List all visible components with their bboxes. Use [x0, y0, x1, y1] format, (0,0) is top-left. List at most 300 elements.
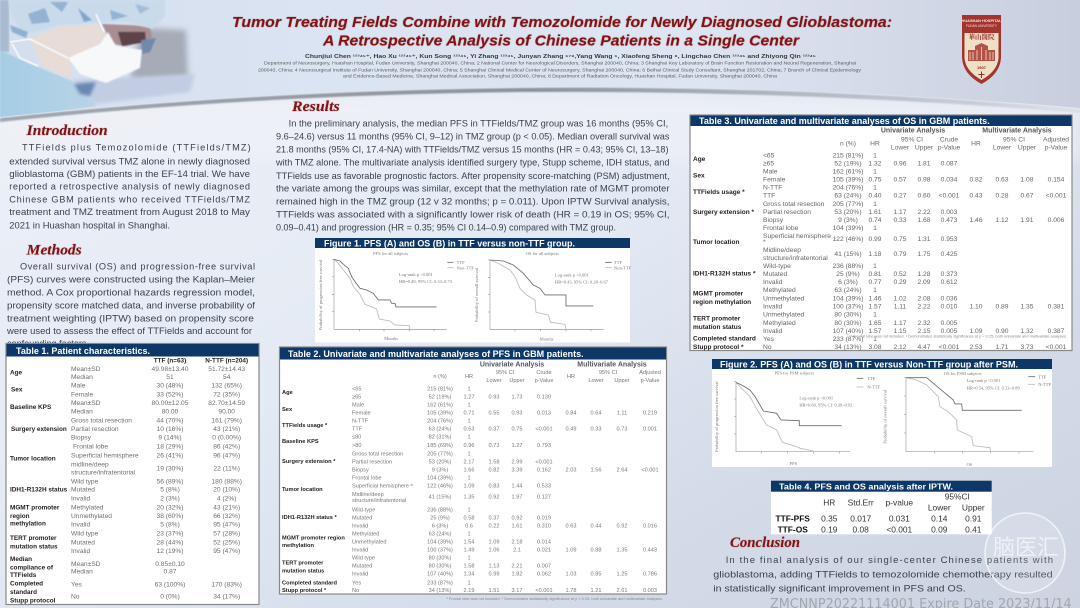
table 2 values: 185 (69%): [427, 443, 453, 449]
table 2 values: <0.001: [641, 468, 659, 474]
table 2 values: 2.64: [617, 468, 627, 474]
table 3 values: 41 (15%): [834, 251, 862, 258]
table 2 values: 2.61: [617, 588, 627, 594]
table 1 category column: Biopsy: [71, 435, 92, 442]
table 2 values: 0.219: [643, 410, 657, 416]
table 3 category column: Unmethylated: [763, 312, 805, 318]
heading: Conclusion: Conclusion: [730, 535, 800, 551]
watermark: circular logo: [985, 513, 1065, 593]
chart: figure 1A PFS: PFS for all subjects: [373, 251, 408, 256]
table 2 values: 0.127: [537, 494, 551, 500]
table 2 values: 1.25: [617, 571, 627, 577]
table 2 values: 1: [467, 386, 471, 392]
chart: figure 2B OS after PSM: Probability of overall survival: [882, 389, 887, 444]
table 2 column headers: Lower: [486, 378, 502, 384]
table 2 category column: ≥65: [352, 394, 361, 400]
logo: Huashan Hospital shield: FUDAN UNIVERSITY: [966, 24, 998, 28]
table 1 values: 43 (21%): [213, 426, 240, 433]
table 1 category column: Superficial hemisphere: [71, 452, 139, 459]
table 1 category column: Gross total resection: [71, 417, 132, 424]
table 1 values: 51.72±14.43: [208, 366, 245, 373]
table 1 values: 132 (65%): [211, 383, 242, 390]
table 2 category column: Female: [352, 410, 371, 416]
table 1 values: 10 (16%): [157, 426, 183, 433]
table 3 values: 0.28: [995, 192, 1009, 200]
table 1 values: 86 (42%): [213, 443, 240, 450]
table 3 column headers: Adjusted: [1043, 136, 1069, 143]
table 2 values: 0.37: [489, 427, 499, 433]
table 3 values: 4.47: [917, 344, 931, 351]
table 1 values: 0.87: [164, 569, 177, 576]
table 1 row labels: Stupp protocol: [10, 597, 56, 604]
table 3 column headers: 95% CI: [901, 136, 923, 143]
table 3 values: 0.034: [941, 176, 958, 184]
affiliations: [258, 61, 862, 79]
table 2 values: 1.49: [464, 547, 474, 553]
table 2 values: 0.63: [566, 523, 576, 529]
table 2 values: 1.21: [591, 588, 601, 594]
text block: methods: treatment weighting (IPTW) based on propensity score: [7, 313, 254, 323]
table 3 values: 0.27: [893, 192, 907, 200]
text block: methods: propensity score matched data, and inverse probability of: [7, 301, 255, 311]
table 1 category column: Mutated: [71, 539, 95, 546]
text block: results: TTFields was associated with a significantly lower risk of death (HR = 0.19 in OS; 95% CI,: [276, 209, 670, 219]
table 2 values: 1.82: [512, 571, 522, 577]
table 3 values: 1: [873, 201, 877, 208]
table 1 category column: Wild type: [71, 531, 99, 538]
table 2 values: 0.37: [489, 515, 499, 521]
table 3 column headers: Lower: [993, 144, 1012, 151]
chart: figure 2A PFS after PSM: HR=0.60, 95% CI: 0.39–0.92: [799, 403, 852, 409]
chart: figure 2A PFS after PSM: PFS for PSM subjects: [775, 371, 814, 376]
table 2 values: 0.92: [617, 523, 627, 529]
table 3 values: 1.32: [868, 160, 882, 168]
table 2 column headers: HR: [465, 374, 473, 380]
table 3 column headers: Upper: [1018, 144, 1037, 151]
chart: figure 2B OS after PSM: [882, 371, 1052, 467]
panel: table 2 PFS analyses: [280, 347, 666, 601]
table 2 values: 1.03: [566, 571, 576, 577]
affiliations: and Evidence-Based Medicine, Shanghai Medical Association, Shanghai 200040, China; 8 Department of Radiation Oncology, Huashan Hospital, Fudan University, Shanghai 200040, China: [343, 74, 778, 79]
table 2 row labels: IDH1-R132H status *: [282, 515, 337, 521]
table 1 values: 80.00±12.05: [152, 400, 189, 407]
table 1 row labels: [10, 370, 68, 604]
table 3 values: 1.08: [1020, 176, 1034, 184]
table 3 values: 0.89: [995, 304, 1009, 310]
text block: methods: Overall survival (OS) and progression-free survival: [20, 262, 255, 272]
table 3 values: 0.96: [893, 160, 907, 168]
table 2 values: 0.82: [489, 468, 499, 474]
table 3 values: 1.15: [893, 328, 907, 335]
table 2 values: 0.85: [591, 571, 601, 577]
text block: introduction: reported a retrospective analysis of newly diagnosed: [9, 182, 250, 192]
table 1 values: 38 (60%): [157, 513, 183, 520]
table 2 values: 41 (15%): [429, 494, 451, 500]
table 3 values: 0.425: [941, 251, 958, 258]
text block: conclusion: In the final analysis of our single-center Chinese patients with: [726, 555, 1053, 566]
table 3 category column: Partial resection: [763, 209, 811, 216]
table 2 row labels: [282, 390, 345, 594]
table 2 values: 0.73: [489, 443, 499, 449]
chart: figure 1B OS: [474, 251, 632, 341]
logo: Huashan Hospital shield: 1907: [977, 65, 987, 70]
text block: introduction: TTFields plus Temozolomide (TTFields/TMZ): [22, 143, 251, 153]
table 2 category column: Invalid: [352, 547, 368, 553]
table 2 values: 1.66: [464, 468, 474, 474]
table 2 category column: N-TTF: [352, 419, 369, 425]
table 3 values: 2.15: [917, 328, 931, 335]
table 3 values: 25 (9%): [836, 271, 860, 278]
table 3 values: 1.61: [868, 209, 882, 216]
table 3 category column: <65: [763, 152, 775, 160]
table 2 values: 1.58: [489, 459, 499, 465]
table 1 values: 57 (28%): [213, 531, 240, 538]
table 3 values: 1.32: [1020, 328, 1034, 335]
table 1 row labels: Sex: [11, 387, 23, 394]
table 3 values: 1.17: [893, 209, 907, 216]
table 3 values: 0.43: [969, 192, 983, 200]
table 2 column headers: 95% CI: [599, 370, 618, 376]
table 3 values: 0.010: [941, 304, 958, 310]
logo: Huashan Hospital shield: 華山醫院: [968, 32, 995, 41]
table 2 values: 0.55: [489, 410, 499, 416]
table 4 rows: TTF-OS: [778, 525, 808, 535]
table 4 column headers: Lower: [928, 503, 951, 513]
table 3 values: 105 (39%): [833, 176, 863, 184]
table 1 values: 22 (11%): [213, 465, 240, 472]
table 2 values: 2.1: [513, 547, 521, 553]
table 3 values: 0.63: [995, 176, 1009, 184]
table 3 values: <0.001: [1046, 344, 1067, 351]
table 2 column headers: HR: [567, 374, 575, 380]
table 3 category column: Gross total resection: [763, 201, 825, 208]
table 1 category column: Male: [71, 383, 86, 390]
table 3 values: [833, 152, 1067, 351]
table 1 row labels: methylation: [10, 521, 46, 528]
table 3 row labels: Age: [693, 156, 706, 163]
table 1 category column: structure/infratentorial: [71, 469, 136, 476]
table 3 values: 104 (39%): [833, 225, 863, 232]
table 3 values: 1.02: [893, 296, 907, 302]
panel: table 1 patient characteristics: [6, 344, 259, 604]
title: [232, 14, 892, 50]
table 2 values: 1: [467, 556, 471, 562]
table 2 values: 204 (76%): [427, 419, 453, 425]
table 3 values: 122 (46%): [833, 236, 863, 243]
chart: figure 2B OS after PSM: OS: [966, 462, 973, 467]
table 3 category column: Female: [763, 176, 786, 184]
table 2 category column: <65: [352, 386, 362, 392]
table 3 values: 1.81: [917, 160, 931, 168]
table 2 values: 0.003: [643, 588, 657, 594]
table 2 values: 0.64: [591, 410, 601, 416]
table 1 category column: Mean±SD: [71, 561, 101, 568]
panel: figure 2 survival curves after PSM: [712, 359, 1052, 467]
table 2 values: 0.93: [512, 410, 522, 416]
table 1 values: 52 (25%): [213, 539, 240, 546]
table 3 row labels: Surgery extension *: [693, 209, 755, 216]
table 2 values: 1.97: [512, 494, 522, 500]
table 2 category column: ≤80: [352, 435, 361, 441]
chart: figure 2A PFS after PSM: Log-rank p <0.001: [799, 395, 833, 400]
table 3 values: 1.18: [868, 251, 882, 258]
table 2 values: 52 (19%): [429, 394, 451, 400]
table 1 category column: midline/deep: [71, 461, 109, 468]
table 2 values: 3.17: [512, 588, 522, 594]
text block: introduction: 2021 in Huashan hospital in Shanghai.: [9, 220, 170, 230]
text block: results: [275, 118, 670, 232]
table 3 category column: structure/infratentorial: [763, 255, 828, 262]
table 3 values: 1: [873, 168, 877, 176]
text block: conclusion: [713, 555, 1053, 594]
table 3 category column: ≥65: [763, 160, 774, 168]
table 2 category column: >80: [352, 443, 362, 449]
chart: figure 1B OS: TTF: [614, 260, 622, 265]
table 3 category column: Frontal lobe: [763, 225, 799, 232]
table 3 values: 1.09: [969, 328, 983, 335]
table 3 values: 80 (30%): [834, 312, 862, 318]
table 3 values: 2.22: [917, 304, 931, 310]
table 2 column headers: Lower: [588, 378, 604, 384]
table 2 values: 0.014: [537, 539, 551, 545]
table 2 values: 1.35: [464, 494, 474, 500]
table 2 row labels: Sex: [282, 407, 293, 413]
table 2 category column: Superficial hemisphere ᵃ: [352, 484, 413, 490]
table 2 category column: Partial resection: [352, 459, 392, 465]
table 3 row labels: Completed standard: [693, 336, 756, 342]
table 2 values: 0.93: [489, 394, 499, 400]
table 3 values: 0.67: [1020, 192, 1034, 200]
table 3 values: 2.53: [969, 344, 983, 351]
table 2 category column: Gross total resection: [352, 451, 403, 457]
table 3 values: 9 (3%): [838, 217, 858, 224]
table 3 values: 0.98: [917, 176, 931, 184]
table 2 values: 2.18: [512, 539, 522, 545]
table 1 values: 0 (0%): [160, 594, 180, 601]
table 3 values: 0.75: [893, 236, 907, 243]
table 4 rows: 0.031: [889, 513, 910, 523]
table 2 values: 236 (88%): [427, 507, 453, 513]
table 1 category column: Median: [71, 569, 93, 576]
table 3 row labels: region methylation: [693, 299, 751, 306]
text block: introduction: extended survival versus TMZ alone in newly diagnosed: [9, 157, 250, 167]
table 2 values: 0.22: [489, 523, 499, 529]
table 1 column headers: N-TTF (n=204): [205, 357, 248, 364]
table 2 values: [427, 386, 659, 594]
table 2 values: 1.11: [617, 410, 627, 416]
text block: methods: [6, 262, 255, 349]
table 3 values: 1.11: [894, 304, 907, 310]
table 3 values: 2.09: [917, 279, 931, 286]
text block: results: 0.09–0.41) and progression (HR = 0.35; 95% CI 0.14–0.9) compared with TMZ group.: [276, 222, 616, 232]
table 1 values: 33 (52%): [157, 391, 183, 398]
table 2 category column: Methylated: [352, 531, 379, 537]
table 3 values: 0.79: [893, 251, 907, 258]
table 2 values: 0.130: [537, 394, 551, 400]
table 3 column headers: Lower: [891, 144, 910, 151]
table 3 category column: Unmethylated: [763, 296, 805, 302]
chart: figure 2A PFS after PSM: TTF: [867, 376, 876, 381]
table 1 category column: Partial resection: [71, 426, 119, 433]
table 3 values: 1.71: [995, 344, 1009, 351]
figure 1 heading: Figure 1. PFS (A) and OS (B) in TTF versus non-TTF group.: [324, 238, 575, 250]
table 1 values: 44 (70%): [157, 417, 183, 424]
table 1 row labels: Age: [10, 370, 23, 377]
table 2 values: 2.03: [566, 468, 576, 474]
table 3 column headers: Multivariate Analysis: [982, 128, 1052, 134]
table 2 values: 1: [467, 581, 471, 587]
table 3 values: 1.17: [893, 320, 907, 327]
table 1 row labels: Tumor location: [10, 456, 56, 463]
table 2 category column: [352, 386, 413, 594]
text block: introduction: [9, 143, 251, 230]
table 4 rows: [775, 513, 982, 535]
table 4 rows: 0.14: [931, 513, 948, 523]
chart: figure 1A PFS: TTF: [457, 260, 465, 265]
table 2 values: 1: [467, 531, 471, 537]
table 1 column headers: TTF (n=63): [154, 357, 186, 364]
table 1 row labels: standard: [10, 589, 37, 596]
table 1 values: 51: [166, 374, 174, 381]
table 2 values: 0.58: [464, 515, 474, 521]
table 2 values: 0.75: [512, 427, 522, 433]
table 1 values: 95 (47%): [213, 548, 240, 555]
table 3 row labels: Stupp protocol *: [693, 344, 744, 351]
table 2 values: 53 (20%): [429, 459, 451, 465]
table 1 category column: Wild type: [71, 478, 99, 485]
table 4 rows: 0.41: [965, 525, 982, 535]
table 2 values: 0.73: [617, 427, 627, 433]
table 2 column headers: Univariate Analysis: [480, 362, 544, 368]
table 3 values: 107 (40%): [833, 328, 863, 335]
table 3 values: 80 (30%): [834, 320, 862, 327]
table 3 column headers: HR: [971, 140, 981, 147]
table 2 values: 0.021: [537, 547, 551, 553]
table 3 category column: Midline/deep: [763, 247, 801, 254]
table 1 values: 19 (30%): [157, 465, 183, 472]
table 1 row labels: Median: [10, 556, 32, 563]
table 1 values: 34 (17%): [213, 594, 240, 601]
table 2 category column: Male: [352, 402, 364, 408]
chart: figure 1B OS: Non-TTF: [614, 265, 632, 270]
table 1 values: 28 (44%): [157, 539, 183, 546]
table 3 values: 2.08: [917, 296, 931, 302]
title: A Retrospective Analysis of Chinese Patients in a Single Center: [322, 32, 800, 50]
table 2 values: 205 (77%): [427, 451, 453, 457]
table 2 values: 1.09: [489, 539, 499, 545]
table 2 values: 34 (13%): [429, 588, 451, 594]
table 4 column headers: [823, 492, 985, 513]
table 1 values: 20 (10%): [213, 487, 240, 494]
table 2 values: 104 (39%): [427, 539, 453, 545]
table 3 values: 1.68: [917, 217, 931, 224]
table 2 values: 0.001: [643, 427, 657, 433]
table 3 values: 1: [873, 263, 877, 270]
table 3 category column: Male: [763, 168, 778, 176]
table 1 category column: Mean±SD: [71, 366, 101, 373]
table 3 values: 0.75: [868, 176, 882, 184]
table 3 values: 233 (87%): [833, 336, 863, 343]
table 1 values: 5 (8%): [160, 522, 180, 529]
table 3 values: 0.473: [941, 217, 958, 224]
table 3 row labels: [693, 156, 756, 351]
table 2 category column: Invalid: [352, 571, 368, 577]
table 3 values: 0.57: [893, 176, 907, 184]
table 3 values: 1.46: [868, 296, 882, 302]
table 1 values: 30 (48%): [157, 383, 183, 390]
table 1 category column: Invalid: [71, 496, 91, 503]
table 2 row labels: methylation: [282, 543, 314, 549]
table 4 rows: 0.017: [850, 513, 872, 523]
table 3 values: 0.387: [1048, 328, 1065, 335]
chart: figure 1A PFS: Months: [384, 336, 398, 341]
table 3 values: 162 (61%): [833, 168, 863, 176]
table 1 category column: Female: [71, 391, 93, 398]
table 2 values: 0.162: [537, 468, 551, 474]
table 2 values: 9 (3%): [432, 468, 448, 474]
text block: results: the variate among the groups was similar, except that the methylation rate of MGMT promoter: [276, 184, 670, 194]
table 2 category column: TTF: [352, 427, 363, 433]
table 1 row labels: IDH1-R132H status: [10, 486, 68, 493]
heading: Introduction: Introduction: [26, 123, 108, 139]
table 3 values: 0.90: [995, 328, 1009, 335]
table 2 values: 2.21: [512, 563, 522, 569]
table 2 values: 0.793: [537, 443, 551, 449]
table 3 values: 52 (19%): [834, 160, 862, 168]
table 2 row labels: Surgery extension *: [282, 459, 336, 465]
table 4 column headers: Std.Err: [848, 498, 874, 508]
table 4 column headers: 95%CI: [945, 492, 970, 502]
table 1 values: 0 (0.00%): [212, 435, 241, 442]
table 4 rows: TTF-PFS: [775, 513, 810, 523]
table 2 values: 1.27: [512, 443, 522, 449]
table 1 values: 43 (21%): [213, 504, 240, 511]
table 1 row labels: mutation status: [10, 544, 58, 551]
table 1 category column: Unmethylated: [71, 513, 112, 520]
text block: conclusion: glioblastoma, adding TTFields to temozolomide chemotherapy resulted: [713, 569, 1053, 580]
table 2 column headers: [433, 362, 661, 384]
table 2 column headers: Adjusted: [639, 370, 661, 376]
table 1 values: 23 (37%): [157, 531, 183, 538]
table 2 category column: structure/infratentorial: [352, 498, 406, 504]
chart: figure 1A PFS: Log-rank p <0.001: [399, 272, 433, 277]
table 1 values: 80.00: [162, 408, 179, 415]
table 3 values: 0.60: [917, 192, 931, 200]
table 2 category column: Yes: [352, 581, 361, 587]
table 1 values: 90.00: [218, 408, 235, 415]
table 3 values: 6 (3%): [838, 279, 858, 286]
table 1 category column: Mutated: [71, 487, 95, 494]
table 1 heading: Table 1. Patient characteristics.: [16, 346, 150, 357]
table 2 values: 104 (39%): [427, 475, 453, 481]
table 2 values: 25 (9%): [430, 515, 450, 521]
panel: table 4 analysis after IPTW: [771, 481, 992, 535]
table 3 values: 0.33: [893, 217, 907, 224]
chart: figure 2A PFS after PSM: N-TTF: [867, 385, 881, 390]
chart: figure 2A PFS after PSM: [714, 371, 881, 466]
table 3 column headers: n (%): [840, 140, 856, 147]
table 3 values: 1.28: [917, 271, 931, 278]
table 1 values: 4 (2%): [217, 496, 236, 503]
table 3 category column: Wild-type: [763, 263, 791, 270]
table 1 values: 9 (14%): [158, 435, 182, 442]
table 3 column headers: [840, 128, 1069, 151]
table 3 values: 0.99: [868, 236, 882, 243]
table 2 column headers: p-Value: [641, 378, 659, 384]
table 3 values: 0.74: [868, 217, 882, 224]
table 2 values: 2.99: [512, 459, 522, 465]
table 4 rows: <0.001: [886, 525, 913, 535]
